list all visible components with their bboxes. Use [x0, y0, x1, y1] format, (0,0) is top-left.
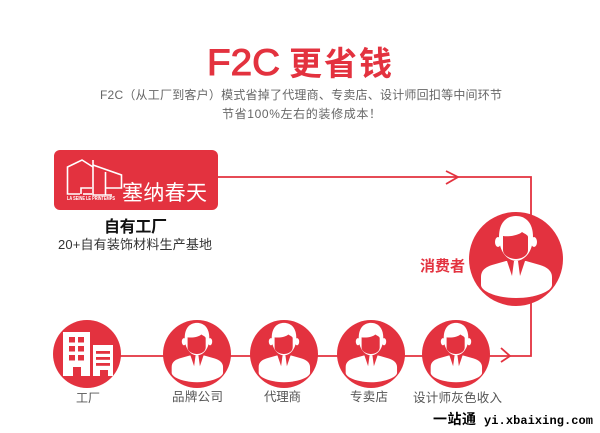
subtitle text: F2C（从工厂到客户）模式省掉了代理商、专卖店、设计师回扣等中间环节 [100, 87, 502, 102]
icon: designer [422, 320, 490, 388]
icon: brand company [163, 320, 231, 388]
label: brand company: 品牌公司 [172, 389, 223, 404]
icon: specialty store [337, 320, 405, 388]
subtitle text: 节省100%左右的装修成本！ [222, 106, 381, 121]
watermark [433, 409, 593, 429]
label: factory: 工厂 [76, 391, 100, 405]
title [207, 42, 392, 83]
label: consumer: 消费者 [420, 257, 465, 275]
icon: agent [250, 320, 318, 388]
panel: brand logo [54, 150, 218, 210]
label: designer gray income: 设计师灰色收入 [413, 390, 502, 405]
icon: consumer [469, 212, 563, 306]
subtitle text [100, 87, 502, 121]
bottom connector arrow [110, 300, 531, 362]
title: 更省钱 [289, 45, 392, 82]
top connector arrow [218, 171, 531, 220]
logo small caption: LA SEINE LE PRINTEMPS [67, 196, 115, 202]
watermark: 一站通 [433, 409, 476, 429]
icon: factory [53, 320, 121, 388]
label: agent: 代理商 [264, 389, 301, 404]
label: specialty store: 专卖店 [350, 389, 388, 404]
title: F2C [207, 42, 280, 83]
watermark: yi.xbaixing.com [484, 414, 593, 428]
icon: house logo mark [68, 160, 122, 195]
heading: own factory: 自有工厂 [104, 217, 167, 236]
text: own factory bases: 20+自有装饰材料生产基地 [58, 237, 212, 252]
logo name: 塞纳春天 [122, 182, 207, 205]
